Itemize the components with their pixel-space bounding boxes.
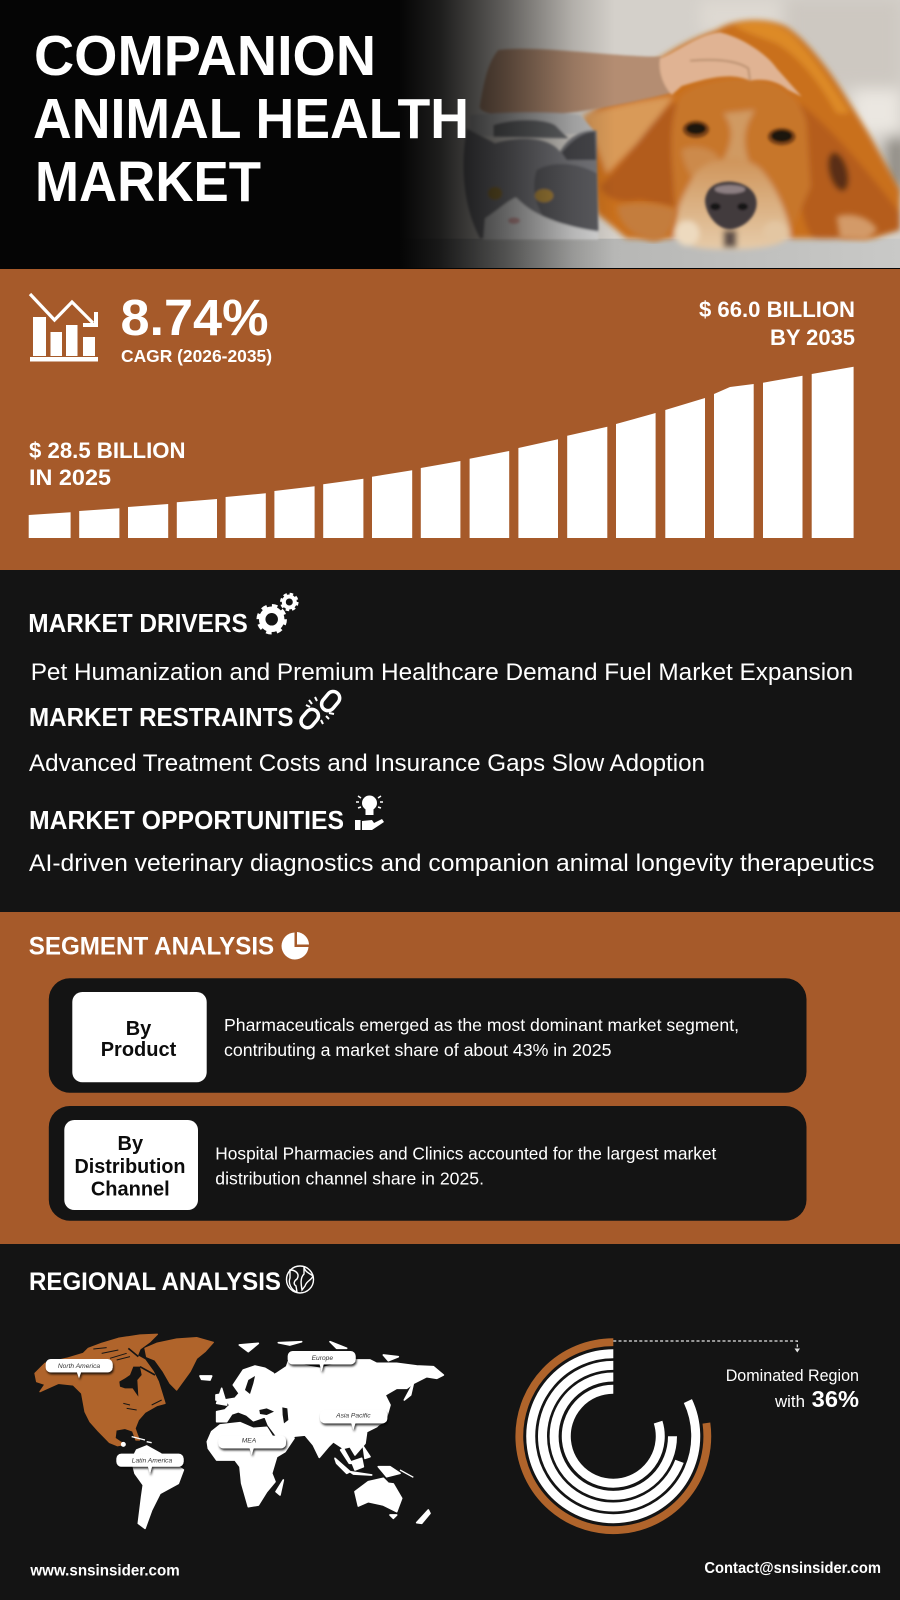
callout: Asia Pacific: Asia Pacific — [335, 1413, 371, 1420]
map seas: Black Sea, Caspian, Baltic — [245, 1376, 288, 1423]
dog body — [583, 20, 900, 238]
callout: Latin America — [116, 1454, 184, 1474]
label box: by distribution channel: Distribution — [74, 1156, 186, 1178]
heading: market restraints: MARKET RESTRAINTS — [29, 702, 294, 732]
callout: dominated region — [726, 1366, 859, 1412]
callout: North America — [46, 1359, 113, 1378]
callout: MEA — [218, 1436, 286, 1455]
dog ear left — [600, 102, 682, 208]
heading: regional analysis: REGIONAL ANALYSIS — [29, 1268, 281, 1296]
start value label: $ 28.5 BILLION — [29, 438, 186, 463]
card: by distribution channel — [49, 1106, 807, 1221]
start value label — [29, 438, 186, 490]
world map — [35, 1334, 443, 1528]
dog eyes — [683, 121, 709, 138]
dog nose — [705, 182, 757, 229]
product description: contributing a market share of about 43% in 2025 — [224, 1040, 612, 1060]
icon: gears — [258, 594, 297, 633]
panel: market size and CAGR — [0, 269, 900, 570]
title: COMPANION — [34, 24, 376, 88]
icon: light bulb in hand — [355, 796, 384, 830]
map region: North America highlighted — [35, 1334, 213, 1446]
label box: by product: Product — [101, 1039, 177, 1061]
dog paws — [617, 203, 677, 242]
title: ANIMAL HEALTH — [33, 87, 469, 151]
map region: rest of world — [122, 1342, 443, 1528]
restraint text: Advanced Treatment Costs and Insurance Gaps Slow Adoption — [29, 750, 705, 777]
product description: Pharmaceuticals emerged as the most dominant market segment, — [224, 1015, 739, 1035]
label box: by product: By — [126, 1018, 152, 1040]
panel: header with pet photo — [0, 0, 900, 269]
callout: Europe — [288, 1351, 356, 1372]
dog ear right — [800, 103, 900, 239]
cat head — [463, 128, 598, 238]
arm — [480, 49, 670, 116]
bar chart: market growth — [29, 367, 854, 538]
heading: segment analysis: SEGMENT ANALYSIS — [29, 932, 274, 960]
start value label: IN 2025 — [29, 465, 111, 490]
distribution description: distribution channel share in 2025. — [215, 1168, 484, 1188]
CAGR value: 8.74% — [120, 289, 268, 346]
icon: broken chain link — [298, 689, 342, 730]
panel: regional analysis — [0, 1244, 900, 1600]
callout: Latin America: Latin America — [132, 1458, 173, 1465]
label box: by distribution channel — [64, 1120, 198, 1210]
footer: contact email: Contact@snsinsider.com — [704, 1560, 881, 1577]
panel: drivers, restraints and opportunities — [0, 570, 900, 912]
heading: market opportunities: MARKET OPPORTUNITIES — [29, 805, 344, 835]
callout: North America: North America — [58, 1363, 100, 1370]
arrow: dashed leader line — [613, 1341, 800, 1352]
distribution description: Hospital Pharmacies and Clinics accounted for the largest market — [215, 1144, 716, 1164]
dog head — [671, 78, 811, 227]
icon: globe — [286, 1266, 314, 1293]
opportunity text: AI-driven veterinary diagnostics and companion animal longevity therapeutics — [29, 850, 874, 877]
callout: dominated region: Dominated Region — [726, 1366, 859, 1385]
CAGR label: CAGR (2026-2035) — [121, 346, 272, 366]
icon: trend chart — [30, 294, 98, 362]
card: by product — [49, 978, 807, 1093]
dog muzzle — [673, 158, 791, 249]
panel: segment analysis — [0, 912, 900, 1244]
end value label: BY 2035 — [770, 325, 855, 350]
heading: market drivers: MARKET DRIVERS — [28, 608, 248, 638]
callout: dominated region: with — [774, 1392, 805, 1411]
radial chart: regional share — [519, 1342, 707, 1530]
callout: Asia Pacific — [320, 1410, 387, 1430]
distribution description — [215, 1144, 716, 1188]
label box: by distribution channel: Channel — [91, 1178, 170, 1200]
driver text: Pet Humanization and Premium Healthcare Demand Fuel Market Expansion — [31, 659, 853, 686]
callout: MEA: MEA — [242, 1438, 257, 1445]
cat body — [481, 111, 595, 134]
callout: Europe: Europe — [312, 1355, 333, 1362]
product description — [224, 1015, 739, 1060]
label box: by product — [72, 992, 207, 1082]
callout: dominated region: 36% — [812, 1386, 859, 1412]
title — [33, 24, 469, 214]
end value label: $ 66.0 BILLION — [699, 297, 855, 322]
end value label — [699, 297, 855, 350]
icon: pie chart — [282, 932, 309, 959]
footer: website: www.snsinsider.com — [29, 1562, 180, 1580]
label box: by distribution channel: By — [118, 1133, 144, 1155]
hand — [660, 32, 802, 97]
title: MARKET — [35, 150, 261, 214]
photo: person petting a dog and a cat — [412, 0, 900, 268]
